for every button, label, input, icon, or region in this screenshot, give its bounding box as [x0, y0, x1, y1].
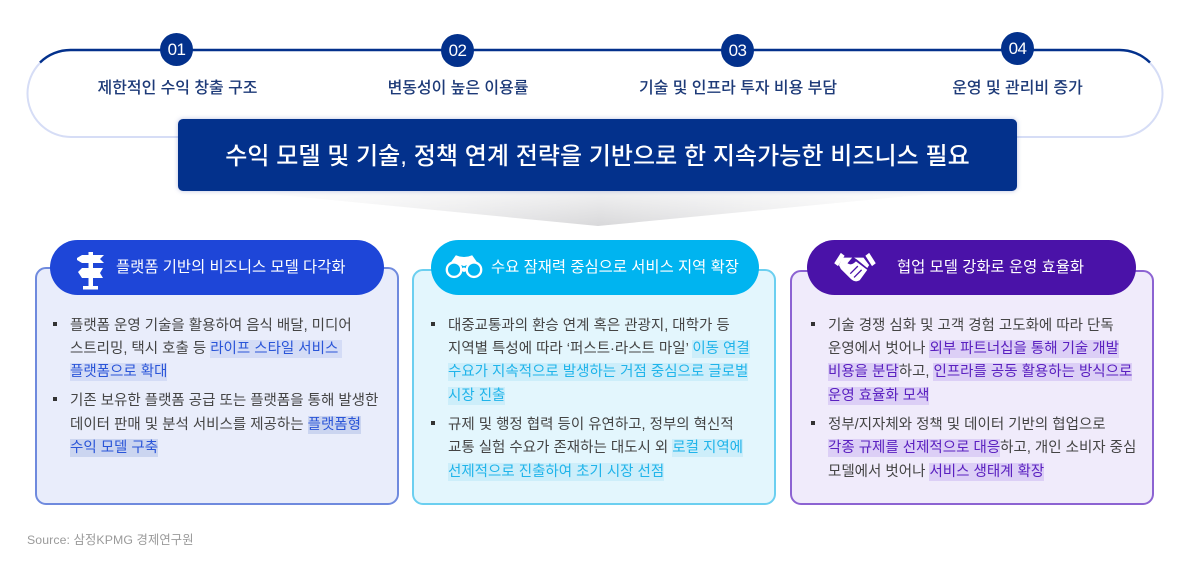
header text: 플랫폼 기반의 비즈니스 모델 다각화	[116, 259, 346, 276]
step 03 number: 03	[729, 41, 746, 60]
line: 규제 및 행정 협력 등이 유연하고, 정부의 혁신적	[448, 417, 734, 433]
line: 수요가 지속적으로 발생하는 거점 중심으로 글로벌	[448, 364, 748, 380]
line: 각종 규제를 선제적으로 대응하고, 개인 소비자 중심	[828, 440, 1136, 456]
line: 플랫폼으로 확대	[70, 364, 167, 380]
icon: signpost	[77, 252, 104, 290]
bullet	[431, 421, 435, 425]
step 01 number	[160, 33, 193, 66]
header text: 협업 모델 강화로 운영 효율화	[897, 259, 1084, 276]
top rounded frame	[26, 48, 1164, 226]
bullet	[811, 421, 815, 425]
step 03 label: 기술 및 인프라 투자 비용 부담	[639, 80, 837, 97]
panel: platform	[35, 267, 399, 505]
icon: handshake	[834, 252, 876, 282]
step 01 number: 01	[168, 40, 185, 59]
line: 시장 진출	[448, 388, 505, 404]
panel: demand	[412, 269, 776, 505]
line: 교통 실험 수요가 존재하는 대도시 외 로컬 지역에	[448, 440, 743, 456]
panel: collaboration	[790, 270, 1154, 505]
line: 수익 모델 구축	[70, 440, 158, 456]
step 02 number: 02	[449, 41, 466, 60]
bullet	[53, 397, 57, 401]
line: 선제적으로 진출하여 초기 시장 선점	[448, 464, 664, 480]
line: 기술 경쟁 심화 및 고객 경험 고도화에 따라 단독	[828, 318, 1114, 334]
step 03 number	[721, 34, 754, 67]
banner	[178, 119, 1017, 191]
line: 스트리밍, 택시 호출 등 라이프 스타일 서비스	[70, 341, 338, 357]
step 04 number: 04	[1009, 39, 1026, 58]
bullet	[811, 322, 815, 326]
line: 플랫폼 운영 기술을 활용하여 음식 배달, 미디어	[70, 318, 352, 334]
line: 데이터 판매 및 분석 서비스를 제공하는 플랫폼형	[70, 417, 361, 433]
source: Source: 삼정KPMG 경제연구원	[27, 533, 194, 547]
banner: 수익 모델 및 기술, 정책 연계 전략을 기반으로 한 지속가능한 비즈니스 필요	[225, 143, 970, 170]
icon: binoculars	[446, 255, 482, 278]
step 01 label: 제한적인 수익 창출 구조	[98, 80, 257, 97]
line: 지역별 특성에 따라 ‘퍼스트·라스트 마일’ 이동 연결	[448, 341, 750, 357]
header: collaboration	[807, 240, 1136, 295]
step 02 number	[441, 34, 474, 67]
line: 운영에서 벗어나 외부 파트너십을 통해 기술 개발	[828, 341, 1119, 357]
bullet	[53, 322, 57, 326]
line: 비용을 분담하고, 인프라를 공동 활용하는 방식으로	[828, 364, 1132, 380]
line: 기존 보유한 플랫폼 공급 또는 플랫폼을 통해 발생한	[70, 393, 378, 409]
step 04 label: 운영 및 관리비 증가	[952, 80, 1083, 97]
header: platform	[50, 240, 384, 295]
step 04 number	[1001, 32, 1034, 65]
line: 모델에서 벗어나 서비스 생태계 확장	[828, 464, 1044, 480]
header text: 수요 잠재력 중심으로 서비스 지역 확장	[491, 259, 739, 276]
header: demand	[431, 240, 759, 295]
step 02 label: 변동성이 높은 이용률	[388, 80, 528, 97]
line: 운영 효율화 모색	[828, 388, 929, 404]
line: 대중교통과의 환승 연계 혹은 관광지, 대학가 등	[448, 318, 730, 334]
bullet	[431, 322, 435, 326]
line: 정부/지자체와 정책 및 데이터 기반의 협업으로	[828, 417, 1106, 433]
